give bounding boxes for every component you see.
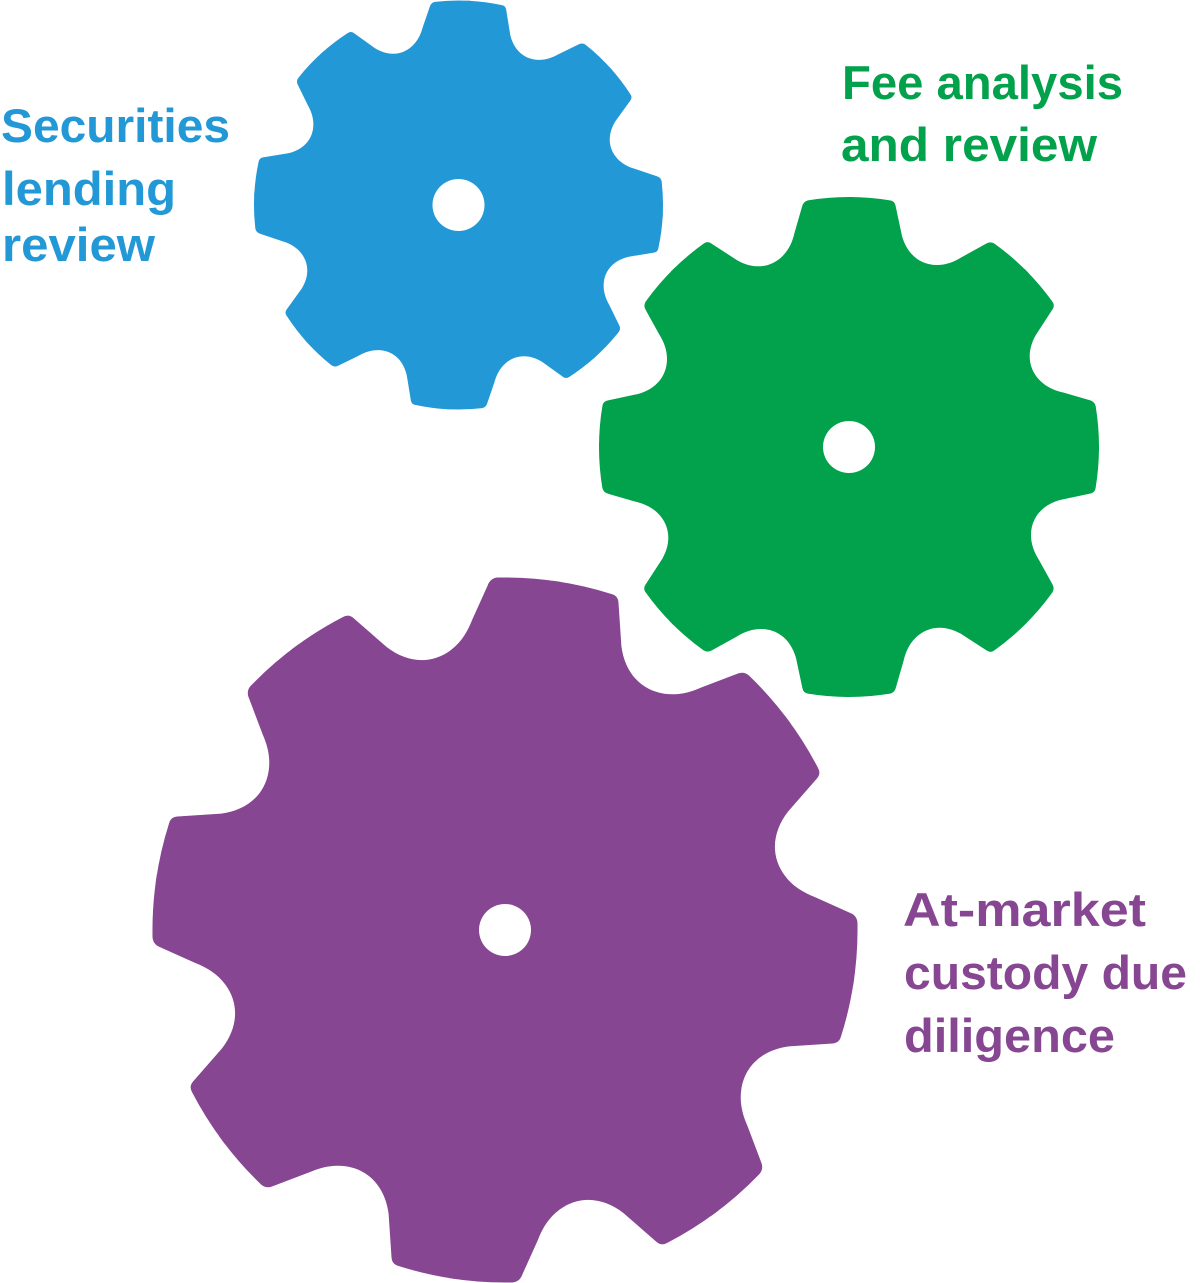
green gear: fee analysis and review — [545, 143, 1153, 751]
purple gear: at-market custody due diligence — [20, 445, 990, 1283]
label: fee analysis and review — [841, 56, 1123, 171]
label: at-market custody due diligence: At-market — [903, 883, 1146, 936]
label: fee analysis and review: and review — [841, 118, 1097, 171]
label: securities lending review: lending — [2, 162, 176, 215]
blue gear: securities lending review — [198, 0, 719, 465]
label: at-market custody due diligence: diligence — [904, 1009, 1115, 1062]
label: at-market custody due diligence: custody due — [904, 946, 1187, 999]
label: fee analysis and review: Fee analysis — [842, 56, 1123, 109]
label: securities lending review: review — [2, 218, 155, 271]
label: securities lending review — [1, 99, 230, 271]
label: securities lending review: Securities — [1, 99, 230, 152]
label: at-market custody due diligence — [903, 883, 1187, 1062]
